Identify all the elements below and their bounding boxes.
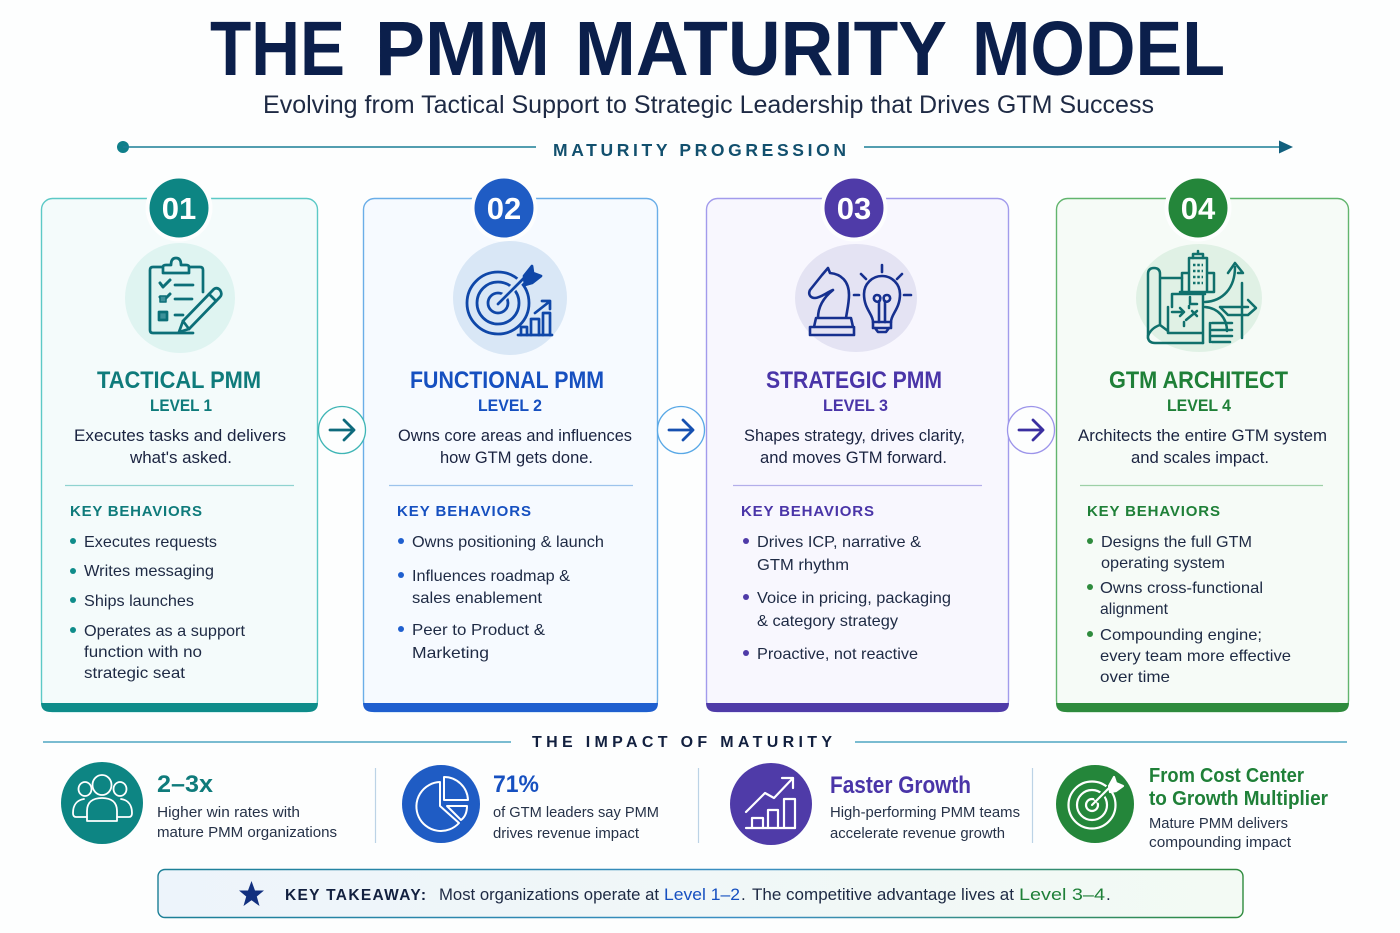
takeaway text: Most organizations operate at (439, 885, 659, 904)
stat description: accelerate revenue growth (830, 825, 1005, 842)
stat heading (1149, 765, 1328, 810)
stat description (157, 804, 337, 841)
stat: faster growth (730, 763, 1020, 845)
key behaviors list: Voice in pricing, packaging (757, 590, 951, 607)
level label: LEVEL 1 (150, 397, 212, 415)
icon: pie chart (402, 765, 480, 843)
number badge 04: 04 (1181, 191, 1216, 226)
icon: chess knight and light bulb (795, 244, 917, 352)
icon: rising bar chart (730, 763, 812, 845)
maturity progression arrow (117, 140, 1293, 160)
description (74, 426, 286, 467)
number badge 04 (1164, 174, 1232, 242)
takeaway text: . (1106, 885, 1111, 904)
number badge 02: 02 (487, 191, 521, 226)
number badge 01 (146, 174, 212, 242)
key behaviors list: Owns cross-functional (1100, 580, 1263, 597)
key behaviors list (741, 503, 951, 663)
panel: level 1 tactical PMM (41, 174, 318, 712)
key behaviors list (1087, 503, 1291, 686)
key behaviors list: strategic seat (84, 665, 186, 682)
stat description: mature PMM organizations (157, 824, 337, 841)
key behaviors list: over time (1100, 669, 1170, 686)
stat description (1149, 815, 1292, 851)
key behaviors list: Owns positioning & launch (412, 534, 604, 551)
heading: tactical PMM: TACTICAL PMM (97, 367, 261, 394)
level label: LEVEL 3 (823, 397, 888, 415)
key behaviors list: KEY BEHAVIORS (1087, 503, 1220, 520)
title: MODEL (972, 6, 1225, 92)
key behaviors list: every team more effective (1100, 648, 1291, 665)
arrow: level 1 to level 2 (318, 406, 366, 454)
stat description: of GTM leaders say PMM (493, 804, 659, 821)
stat heading: to Growth Multiplier (1149, 788, 1328, 810)
description: Executes tasks and delivers (74, 426, 286, 445)
key behaviors list: Operates as a support (84, 623, 246, 640)
icon: blueprint, building and branching arrows (1136, 244, 1262, 352)
arrow: level 2 to level 3 (658, 406, 704, 454)
description: what's asked. (129, 448, 232, 467)
takeaway text: The competitive advantage lives at (752, 885, 1014, 904)
level label: LEVEL 4 (1167, 397, 1232, 415)
key behaviors list: & category strategy (757, 613, 898, 630)
key behaviors list: GTM rhythm (757, 557, 849, 574)
key behaviors list (397, 503, 604, 662)
key behaviors list (70, 503, 246, 682)
description: and scales impact. (1131, 448, 1269, 467)
key behaviors list: Ships launches (84, 593, 194, 610)
callout: key takeaway (158, 870, 1243, 918)
key behaviors list: alignment (1100, 601, 1169, 618)
stat value: 71% (493, 771, 539, 798)
stat description (493, 804, 659, 842)
stat description: drives revenue impact (493, 825, 640, 842)
description: Architects the entire GTM system (1078, 426, 1327, 445)
number badge 01: 01 (162, 191, 196, 226)
description (398, 426, 632, 467)
number badge 02 (470, 174, 538, 242)
key behaviors list: Designs the full GTM (1101, 534, 1252, 551)
icon: star (239, 881, 264, 906)
key behaviors list: KEY BEHAVIORS (70, 503, 202, 520)
number badge 03: 03 (837, 191, 871, 226)
description: Owns core areas and influences (398, 426, 632, 445)
heading: functional PMM: FUNCTIONAL PMM (410, 367, 604, 394)
key behaviors list: Proactive, not reactive (757, 646, 918, 663)
stat: 71% (402, 765, 659, 843)
section heading: the impact of maturity: THE IMPACT OF MATURITY (532, 734, 832, 751)
subtitle: Evolving from Tactical Support to Strategic Leadership that Drives GTM Success (263, 91, 1154, 119)
takeaway text (439, 885, 1111, 904)
title: THE (210, 6, 345, 92)
panel: level 2 functional PMM (363, 174, 658, 712)
key behaviors list: Marketing (412, 645, 489, 662)
key behaviors list: KEY BEHAVIORS (397, 503, 531, 520)
key behaviors list: function with no (84, 644, 202, 661)
key behaviors list: Executes requests (84, 534, 217, 551)
stat: 2-3x win rates (61, 762, 337, 844)
level label: LEVEL 2 (478, 397, 542, 415)
title (210, 6, 1225, 92)
icon: people group (61, 762, 143, 844)
stat description (830, 804, 1020, 842)
number badge 03 (820, 174, 888, 242)
description: Shapes strategy, drives clarity, (744, 426, 965, 445)
description (744, 426, 965, 467)
key behaviors list: operating system (1101, 555, 1225, 572)
key behaviors list: sales enablement (412, 590, 543, 607)
description: how GTM gets done. (440, 448, 593, 467)
stat description: compounding impact (1149, 834, 1292, 851)
heading: strategic PMM: STRATEGIC PMM (766, 367, 942, 394)
stat description: Mature PMM delivers (1149, 815, 1288, 832)
title: MATURITY (575, 6, 947, 92)
maturity progression arrow: MATURITY PROGRESSION (553, 140, 846, 160)
icon: target with arrow and bars (453, 241, 567, 355)
key behaviors list: Compounding engine; (1100, 627, 1262, 644)
stat heading: From Cost Center (1149, 765, 1304, 787)
title: PMM (375, 6, 550, 92)
panel: level 3 strategic PMM (706, 174, 1009, 712)
arrow: level 3 to level 4 (1008, 406, 1054, 454)
panel: level 4 GTM architect (1056, 174, 1349, 712)
stat value: 2–3x (157, 771, 214, 798)
takeaway text: Level 1–2 (664, 885, 740, 904)
stat description: Higher win rates with (157, 804, 300, 821)
stat heading: Faster Growth (830, 772, 971, 799)
key behaviors list: Peer to Product & (412, 622, 545, 639)
icon: clipboard and pencil (125, 243, 235, 353)
heading: GTM architect: GTM ARCHITECT (1109, 367, 1288, 394)
takeaway text: . (741, 885, 746, 904)
key behaviors list: KEY BEHAVIORS (741, 503, 874, 520)
description: and moves GTM forward. (760, 448, 947, 467)
stat: cost center to growth multiplier (1056, 765, 1328, 851)
icon: target with arrow (1056, 765, 1134, 843)
key behaviors list: Influences roadmap & (412, 568, 570, 585)
description (1078, 426, 1327, 467)
key behaviors list: Writes messaging (84, 563, 214, 580)
takeaway text: Level 3–4 (1019, 885, 1105, 904)
takeaway label: KEY TAKEAWAY: (285, 887, 426, 904)
stat description: High-performing PMM teams (830, 804, 1020, 821)
key behaviors list: Drives ICP, narrative & (757, 534, 921, 551)
